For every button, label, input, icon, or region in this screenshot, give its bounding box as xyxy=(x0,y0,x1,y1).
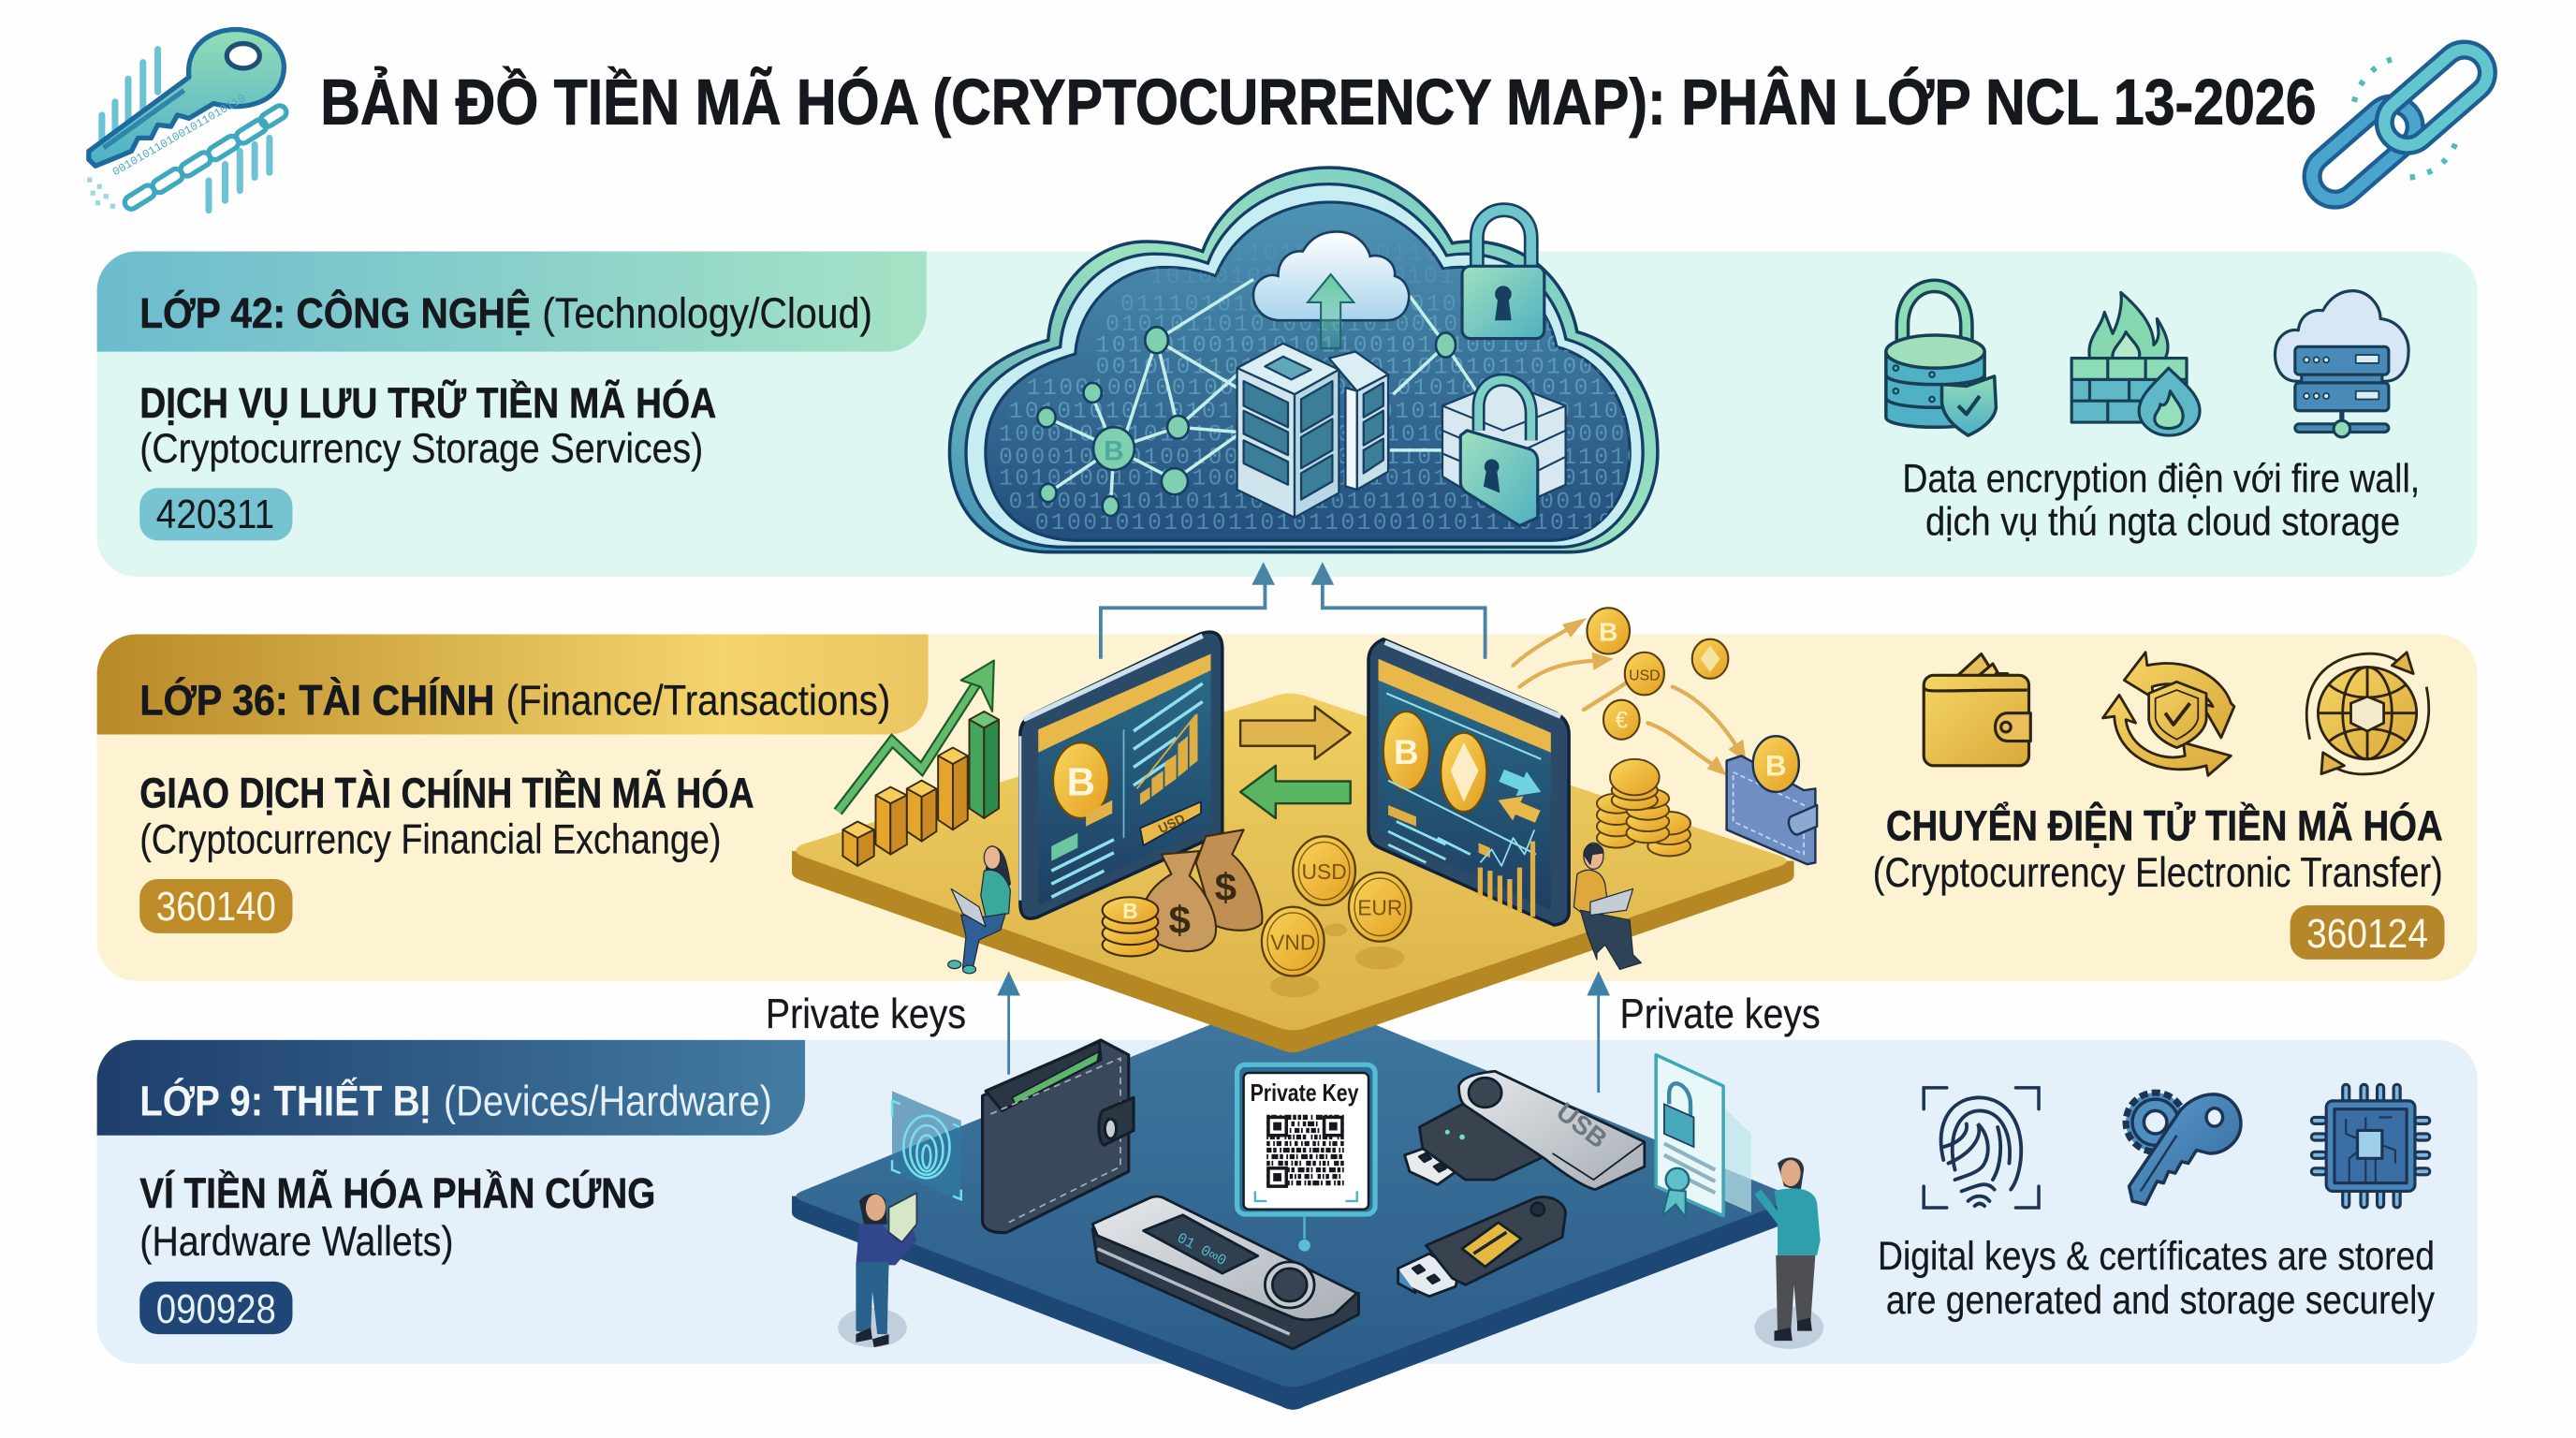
server tower back xyxy=(1329,352,1388,490)
tablet right xyxy=(1368,639,1569,925)
label: private keys right: Private keys xyxy=(1620,990,1821,1037)
tablet left xyxy=(1020,632,1222,918)
flying coins: USD xyxy=(1629,668,1661,684)
padlock top xyxy=(1462,210,1544,339)
device: QR private key card: Private Key xyxy=(1251,1080,1359,1107)
arrow: private keys left xyxy=(997,971,1020,1075)
QR code xyxy=(1266,1116,1344,1188)
wallet with coin: B xyxy=(1765,748,1787,782)
network lines xyxy=(1046,279,1479,506)
device: USB swivel drive xyxy=(1405,1071,1645,1190)
binary pattern: 0101011010100101010010100101 xyxy=(1105,313,1557,338)
section text: finance xyxy=(139,675,890,933)
arrow: left exchange xyxy=(1240,766,1351,818)
badge: 360140: 360140 xyxy=(156,884,276,930)
icon: firewall with flames xyxy=(2071,292,2200,435)
device: USB key xyxy=(1398,1197,1566,1297)
cloud illustration xyxy=(949,168,1660,552)
subheading: hardware wallets: VÍ TIỀN MÃ HÓA PHẦN CỨNG xyxy=(139,1168,655,1217)
panel: technology layer xyxy=(97,252,2478,577)
binary pattern: 1010100101011000010101010101001001101010 xyxy=(999,467,1643,492)
text: technology description: dịch vụ thú ngta cloud storage xyxy=(1925,499,2400,544)
heading: layer 9 xyxy=(139,1077,772,1125)
growth arrow xyxy=(838,661,994,812)
text: electronic transfer xyxy=(1873,801,2445,960)
icon: secure transfer cycle xyxy=(2102,653,2234,775)
binary pattern: 0100101010101101011010010101110101101 xyxy=(1035,511,1631,536)
fiat coins: USD EUR VND: EUR xyxy=(1357,896,1402,920)
device: hardware wallet ledger xyxy=(1092,1196,1358,1349)
binary pattern: 01011010100101101 xyxy=(1183,242,1456,267)
tablet right: B xyxy=(1394,733,1419,771)
icon: microchip xyxy=(2311,1084,2430,1208)
icon: key and chain: 0010101101001011010110 xyxy=(110,92,248,179)
tablet left: B xyxy=(1067,759,1095,803)
arrow: right exchange xyxy=(1240,707,1351,759)
text: devices description: are generated and storage securely xyxy=(1886,1278,2435,1323)
icon: gold wallet xyxy=(1924,654,2030,766)
bar chart rising xyxy=(842,712,999,866)
binary pattern xyxy=(999,242,1660,536)
icon: globe orbit xyxy=(2306,653,2429,774)
icon: fingerprint scan xyxy=(1924,1088,2039,1208)
caption: financial exchange english: (Cryptocurrency Financial Exchange) xyxy=(139,816,722,863)
tab: devices header xyxy=(97,1040,805,1136)
flying coins: B xyxy=(1599,617,1617,646)
coin stack right xyxy=(1597,759,1690,856)
heading: layer 36: LỚP 36: TÀI CHÍNH xyxy=(139,675,494,724)
text: devices description xyxy=(1878,1234,2435,1323)
binary pattern: 101001001010101100101010010101010 xyxy=(1096,334,1627,360)
subheading: financial exchange: GIAO DỊCH TÀI CHÍNH TIỀN MÃ HÓA xyxy=(139,769,754,817)
binary pattern: 101010101101010100101010101010101101101 xyxy=(1009,400,1636,425)
section text: technology xyxy=(139,288,872,540)
binary pattern: 0000101101001000101010101101010111011010 xyxy=(999,446,1643,471)
heading: layer 42: LỚP 42: CÔNG NGHỆ xyxy=(139,288,531,337)
arrows: finance to technology xyxy=(1101,562,1486,659)
blue platform xyxy=(792,994,1794,1410)
heading: layer 36: (Finance/Transactions) xyxy=(506,676,890,724)
icon: key with gear xyxy=(2126,1093,2241,1204)
server tower front xyxy=(1237,344,1339,518)
tab: technology header xyxy=(97,252,927,352)
heading: layer 9: (Devices/Hardware) xyxy=(444,1078,772,1125)
device: QR private key card xyxy=(1237,1064,1375,1252)
text: technology description: Data encryption điện với fire wall, xyxy=(1902,457,2420,502)
fiat coins: USD EUR VND: USD xyxy=(1302,859,1347,884)
money bags and coins: $ xyxy=(1215,865,1237,909)
icon: cloud server xyxy=(2276,291,2408,437)
tablet left: USD xyxy=(1156,811,1187,836)
money bags and coins: $ xyxy=(1168,898,1191,942)
icon: database with lock and shield xyxy=(1886,286,1996,435)
text: technology description xyxy=(1902,457,2420,544)
text: devices description: Digital keys & certíficates are stored xyxy=(1878,1234,2435,1279)
small upload cloud xyxy=(1253,231,1409,348)
flying coins xyxy=(1513,608,1747,775)
heading: layer 36 xyxy=(139,675,890,724)
network nodes xyxy=(1037,327,1456,516)
certificate xyxy=(1656,1055,1751,1217)
subheading: electronic transfer: CHUYỂN ĐIỆN TỬ TIỀN MÃ HÓA xyxy=(1886,801,2443,850)
section text: devices xyxy=(139,1077,772,1334)
title: BẢN ĐỒ TIỀN MÃ HÓA (CRYPTOCURRENCY MAP): PHÂN LỚP NCL 13-2026 xyxy=(320,66,2317,139)
caption: hardware wallets english: (Hardware Wallets) xyxy=(139,1218,453,1265)
person: man at terminal xyxy=(838,1193,916,1347)
wallet with coin xyxy=(1727,736,1817,864)
arrow: private keys right xyxy=(1587,971,1610,1093)
label: private keys left: Private keys xyxy=(766,990,966,1037)
badge: 090928: 090928 xyxy=(156,1286,276,1332)
flying coins: € xyxy=(1615,708,1628,733)
person: man pointing xyxy=(1754,1157,1823,1349)
binary pattern: 1010010110101100101 xyxy=(1150,265,1456,290)
heading: layer 9: LỚP 9: THIẾT BỊ xyxy=(139,1077,431,1125)
subheading: storage services: DỊCH VỤ LƯU TRỮ TIỀN MÃ HÓA xyxy=(139,378,716,427)
tab: finance header xyxy=(97,634,929,734)
money bags and coins xyxy=(1103,829,1262,956)
panel: devices layer xyxy=(97,1040,2478,1364)
binary pattern: 00101011010101001011010101101000010 xyxy=(1096,355,1660,380)
caption: storage services english: (Cryptocurrency Storage Services) xyxy=(139,425,703,472)
badge: 420311: 420311 xyxy=(156,492,274,537)
icon: key and chain xyxy=(87,29,289,212)
padlock on server stack xyxy=(1442,380,1566,526)
panel: finance layer xyxy=(97,634,2478,981)
caption: electronic transfer english: (Cryptocurrency Electronic Transfer) xyxy=(1873,849,2443,896)
fiat coins: USD EUR VND xyxy=(1262,836,1412,997)
fingerprint screen xyxy=(892,1091,961,1201)
badge: 360124: 360124 xyxy=(2306,911,2428,957)
device: leather wallet xyxy=(983,1040,1134,1233)
binary pattern: 01110101010010110101001 xyxy=(1120,293,1491,318)
person: woman with laptop xyxy=(948,846,1010,974)
cloud illustration: B xyxy=(1104,435,1124,466)
binary pattern: 1000101010101010101010101010010100000000 xyxy=(999,422,1643,448)
fiat coins: USD EUR VND: VND xyxy=(1270,930,1315,954)
binary pattern: 01000101011011100011010110101010100101 xyxy=(1009,490,1620,515)
heading: layer 42: (Technology/Cloud) xyxy=(542,289,872,337)
heading: layer 42 xyxy=(139,288,872,337)
binary pattern: 1100100100100010101001101010010101011 xyxy=(1027,376,1622,402)
device: hardware wallet ledger: 01 0∞0 xyxy=(1174,1230,1229,1269)
device: USB swivel drive: USB xyxy=(1551,1097,1613,1153)
money bags and coins: B xyxy=(1122,899,1138,923)
person: man with laptop xyxy=(1573,843,1641,969)
gold platform xyxy=(792,694,1794,1052)
icon: chain link xyxy=(2303,40,2496,209)
